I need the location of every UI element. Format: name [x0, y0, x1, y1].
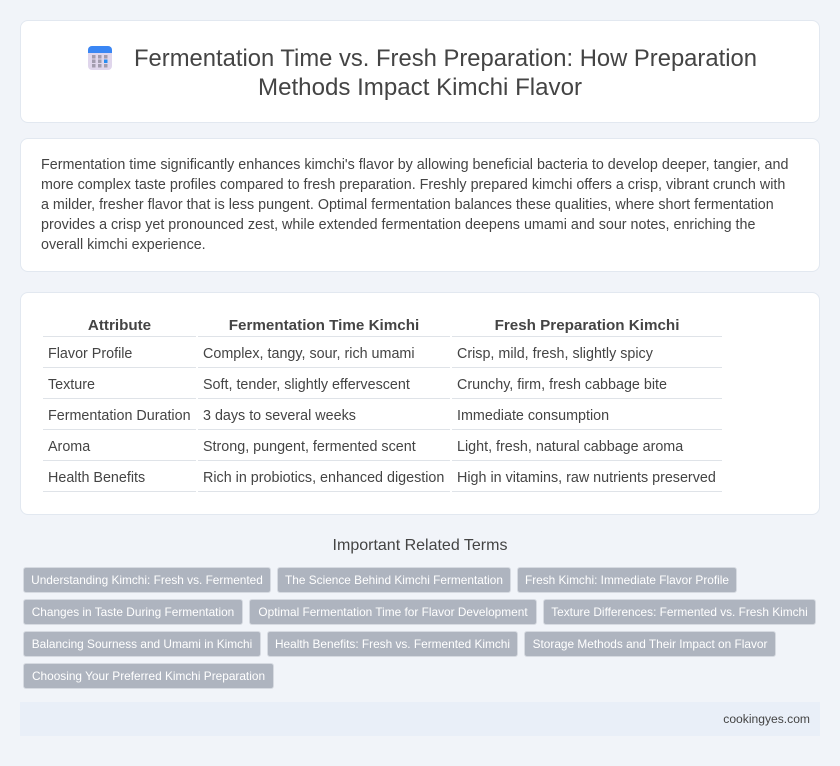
text: Flavor Profile [48, 346, 132, 362]
table header: fresh: Fresh Preparation Kimchi [495, 317, 679, 334]
tag [277, 567, 511, 593]
tag [249, 599, 537, 625]
tag: Understanding Kimchi: Fresh vs. Fermented [31, 573, 263, 587]
tag [23, 631, 261, 657]
related terms heading: Important Related Terms [333, 537, 507, 554]
title: Methods Impact Kimchi Flavor [258, 74, 582, 101]
title [134, 45, 757, 101]
text: High in vitamins, raw nutrients preserved [457, 470, 716, 486]
tag [524, 631, 776, 657]
tag: Changes in Taste During Fermentation [32, 605, 234, 619]
text: Crunchy, firm, fresh cabbage bite [457, 377, 667, 393]
intro text: Fermentation time significantly enhances kimchi's flavor by allowing beneficial bacteria to develop deeper, tangier, and [41, 157, 788, 173]
tag: The Science Behind Kimchi Fermentation [285, 573, 503, 587]
tag [23, 599, 243, 625]
panel: intro [20, 138, 820, 272]
text: Complex, tangy, sour, rich umami [203, 346, 415, 362]
text: 3 days to several weeks [203, 408, 356, 424]
panel: comparison table [20, 292, 820, 515]
icon: calendar [88, 46, 112, 70]
tag [23, 663, 274, 689]
tag: Optimal Fermentation Time for Flavor Development [258, 605, 528, 619]
table header: fermentation: Fermentation Time Kimchi [229, 317, 419, 334]
tag: Fresh Kimchi: Immediate Flavor Profile [525, 573, 729, 587]
footer source text: cookingyes.com [723, 712, 810, 726]
text: Aroma [48, 439, 90, 455]
intro text: overall kimchi experience. [41, 237, 206, 253]
table [42, 317, 724, 493]
tag [517, 567, 737, 593]
tag: Health Benefits: Fresh vs. Fermented Kimchi [275, 637, 510, 651]
footer bar [20, 702, 820, 736]
table header: attribute: Attribute [88, 317, 151, 334]
text: Rich in probiotics, enhanced digestion [203, 470, 444, 486]
tag [267, 631, 518, 657]
tag [543, 599, 816, 625]
text: Light, fresh, natural cabbage aroma [457, 439, 683, 455]
text: Soft, tender, slightly effervescent [203, 377, 410, 393]
tag: Balancing Sourness and Umami in Kimchi [32, 637, 252, 651]
intro text: more complex taste profiles compared to fresh preparation. Freshly prepared kimchi offers a crisp, vibrant crunch with [41, 177, 785, 193]
intro text: a milder, fresher flavor that is less pungent. Optimal fermentation balances these qualities, where short fermentation [41, 197, 774, 213]
intro text [41, 157, 788, 253]
panel: title header [20, 20, 820, 123]
text: Immediate consumption [457, 408, 609, 424]
text: Health Benefits [48, 470, 145, 486]
tag [23, 567, 271, 593]
tag: Storage Methods and Their Impact on Flavor [533, 637, 767, 651]
text: Texture [48, 377, 95, 393]
intro text: provides a crisp yet pronounced zest, while extended fermentation deepens umami and sour notes, enriching the [41, 217, 755, 233]
tag: Texture Differences: Fermented vs. Fresh Kimchi [551, 605, 808, 619]
tag: Choosing Your Preferred Kimchi Preparation [32, 669, 265, 683]
title: Fermentation Time vs. Fresh Preparation: How Preparation [134, 45, 757, 72]
text: Strong, pungent, fermented scent [203, 439, 416, 455]
text: Fermentation Duration [48, 408, 191, 424]
text: Crisp, mild, fresh, slightly spicy [457, 346, 653, 362]
